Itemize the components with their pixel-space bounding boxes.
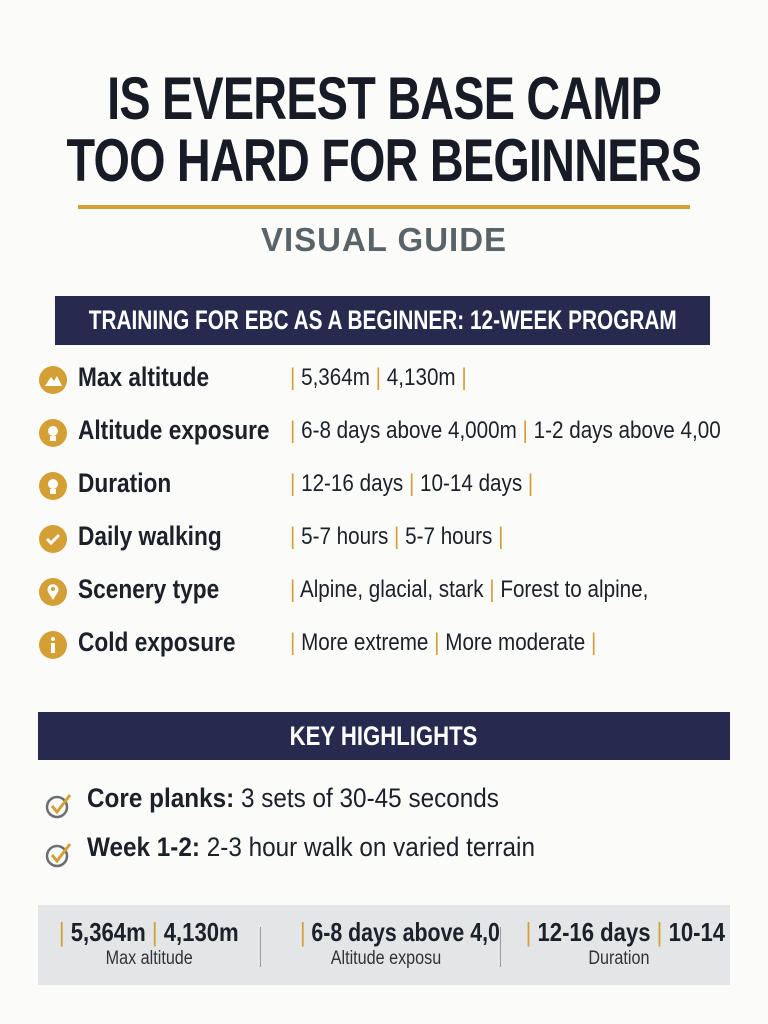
row: daily walking: Daily walking xyxy=(78,521,222,551)
stat: altitude exposure: | 6-8 days above 4,0 xyxy=(300,917,500,947)
banner: training program: TRAINING FOR EBC AS A BEGINNER: 12-WEEK PROGRAM xyxy=(89,305,676,335)
stat: max altitude: Max altitude xyxy=(105,948,193,969)
row: max altitude: | 5,364m | 4,130m | xyxy=(290,364,467,391)
stat: max altitude xyxy=(59,917,239,969)
row: scenery type: Scenery type xyxy=(78,574,219,604)
stat: max altitude: | 5,364m | 4,130m xyxy=(59,917,239,947)
highlight: week 1-2: Week 1-2: 2-3 hour walk on varied terrain xyxy=(87,832,535,862)
stat: altitude exposure xyxy=(300,917,500,969)
row: daily walking: | 5-7 hours | 5-7 hours | xyxy=(290,523,503,550)
banner: key highlights xyxy=(38,712,730,760)
stat: duration: | 12-16 days | 10-14 xyxy=(526,917,725,947)
banner: key highlights: KEY HIGHLIGHTS xyxy=(290,721,478,751)
row: daily walking xyxy=(39,521,503,553)
row: altitude exposure: | 6-8 days above 4,000m | 1-2 days above 4,00 xyxy=(290,417,721,444)
title: TOO HARD FOR BEGINNERS xyxy=(67,127,701,194)
stat: altitude exposure: Altitude exposu xyxy=(330,948,441,969)
row: altitude exposure: Altitude exposure xyxy=(78,415,270,445)
row: duration xyxy=(39,468,533,500)
highlight: core planks: Core planks: 3 sets of 30-45 seconds xyxy=(87,783,499,813)
row: cold exposure: | More extreme | More moderate | xyxy=(290,629,596,656)
title: IS EVEREST BASE CAMP xyxy=(107,65,661,132)
row: cold exposure xyxy=(39,627,596,659)
row: max altitude: Max altitude xyxy=(78,362,209,392)
comparison rows xyxy=(39,362,721,659)
highlight list xyxy=(46,783,535,868)
row: cold exposure: Cold exposure xyxy=(78,627,236,657)
stat: duration xyxy=(526,917,725,969)
row: max altitude xyxy=(39,362,467,394)
row: scenery type: | Alpine, glacial, stark | Forest to alpine, xyxy=(290,576,648,603)
stats strip xyxy=(38,905,730,985)
title xyxy=(67,65,701,194)
subtitle: VISUAL GUIDE xyxy=(261,221,507,258)
row: duration: | 12-16 days | 10-14 days | xyxy=(290,470,533,497)
gold rule xyxy=(78,205,690,209)
banner: training program xyxy=(55,296,710,345)
stat: duration: Duration xyxy=(588,948,650,969)
row: altitude exposure xyxy=(39,415,721,447)
row: duration: Duration xyxy=(78,468,171,498)
row: scenery type xyxy=(39,574,648,606)
